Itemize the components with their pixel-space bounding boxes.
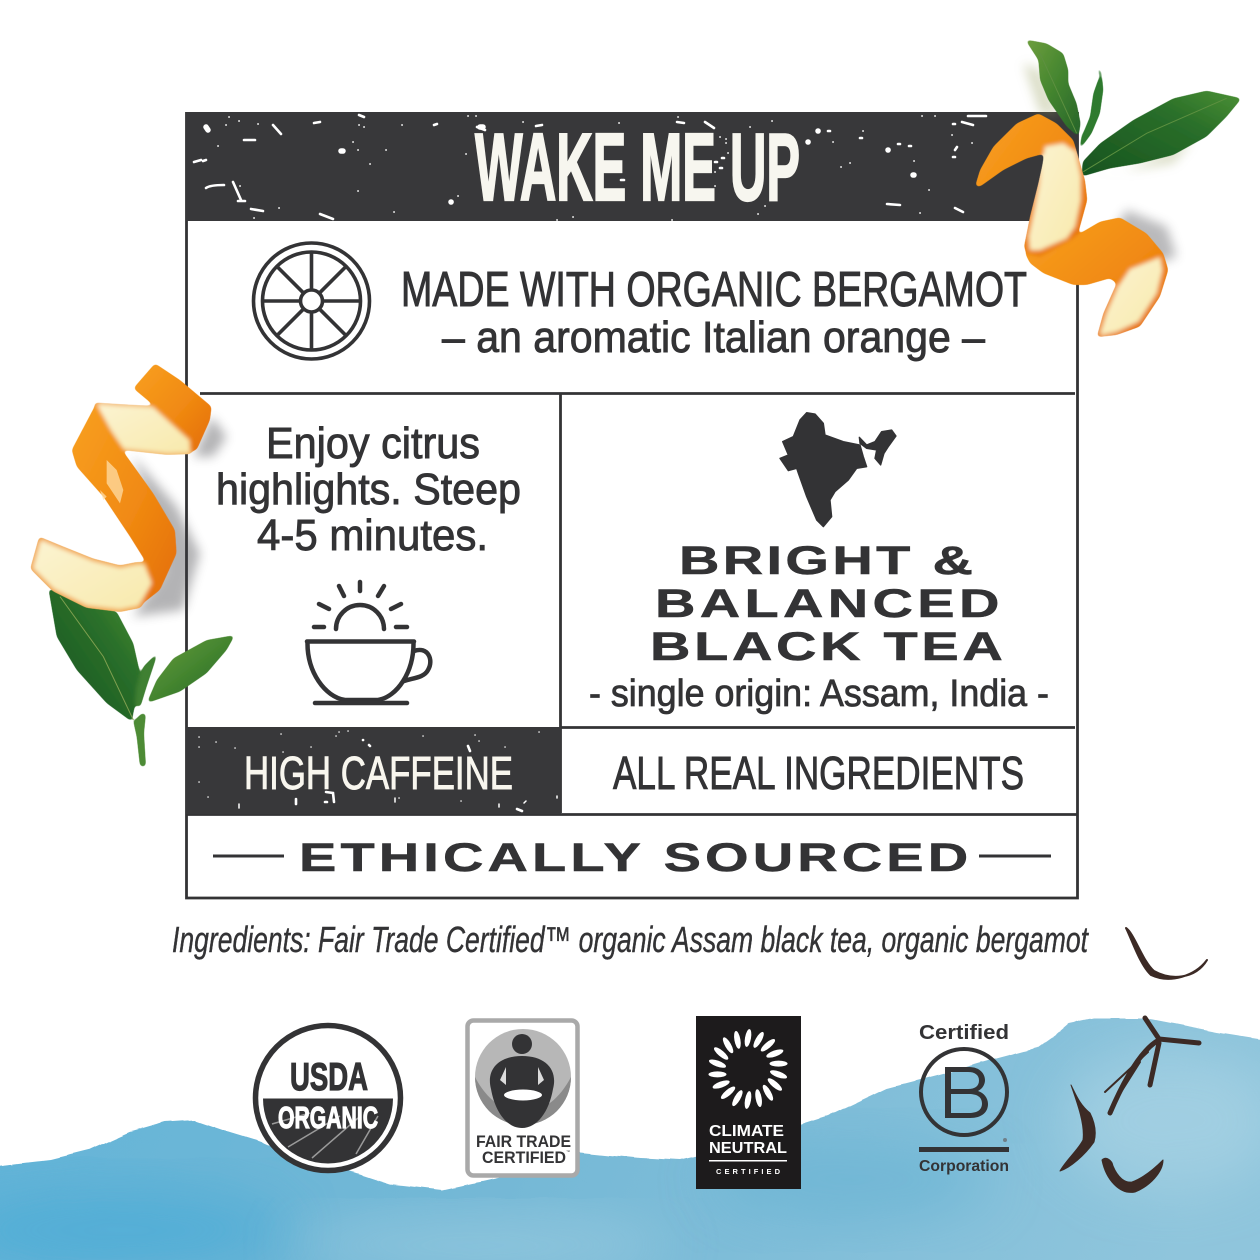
badge: climate neutral <box>696 1016 801 1189</box>
text: enjoy citrus: highlights. Steep <box>216 465 521 514</box>
badge: certified b corporation: Certified <box>919 1022 1009 1044</box>
dried tea leaves <box>1060 928 1207 1192</box>
badge: climate neutral: CLIMATE <box>709 1123 784 1140</box>
header band <box>186 112 1078 221</box>
subheading: aromatic italian orange: – an aromatic Italian orange – <box>442 313 985 362</box>
tea leaf: top <box>1126 928 1207 979</box>
shadows <box>1023 63 1193 263</box>
icon: orange slice <box>254 243 370 359</box>
heading: bright and balanced black tea: BRIGHT & <box>679 539 973 583</box>
text: single origin: - single origin: Assam, India - <box>589 673 1049 715</box>
badge: usda organic <box>256 1026 400 1170</box>
garnish: orange peel and tea leaves left <box>32 363 235 767</box>
peel <box>32 363 212 611</box>
badge: high caffeine <box>186 727 561 814</box>
leaves <box>48 588 235 767</box>
panel: steep instructions <box>216 419 521 703</box>
peel <box>975 113 1168 337</box>
icon: india map <box>780 413 896 527</box>
title: WAKE ME UP: WAKE ME UP <box>475 114 800 221</box>
frame outline <box>186 112 1078 898</box>
leaf veins <box>1040 53 1227 172</box>
heading: bright and balanced black tea: BALANCED <box>655 582 999 626</box>
garnish: orange peel and tea leaves top right <box>975 39 1242 337</box>
text: enjoy citrus: 4-5 minutes. <box>257 511 488 560</box>
badge: climate neutral: CERTIFIED <box>716 1167 781 1176</box>
badge: usda organic: USDA <box>290 1056 368 1099</box>
peel highlight <box>100 460 123 503</box>
badge: fair trade certified: ™ <box>566 1149 570 1154</box>
text: enjoy citrus <box>216 419 521 560</box>
badge: climate neutral: NEUTRAL <box>709 1140 787 1157</box>
background watercolor wave <box>0 1010 1260 1260</box>
badge: fair trade certified: FAIR TRADE <box>476 1132 571 1151</box>
badge: fair trade certified: CERTIFIED <box>482 1148 566 1167</box>
tea leaf: thin strand <box>1105 1052 1148 1100</box>
badge: high caffeine: HIGH CAFFEINE <box>244 747 513 799</box>
badge: fair trade certified <box>468 1020 578 1176</box>
tea leaf: branch <box>1110 1018 1199 1113</box>
leaves <box>1025 39 1242 177</box>
icon: cup with rising sun <box>307 582 430 703</box>
tea leaf: left curve <box>1060 1085 1095 1171</box>
heading: bright and balanced black tea: BLACK TEA <box>650 625 1003 669</box>
badge: usda organic: ORGANIC <box>278 1100 378 1135</box>
caffeine speckles <box>199 731 557 811</box>
heading: made with organic bergamot: MADE WITH ORGANIC BERGAMOT <box>401 263 1027 317</box>
badge: certified b corporation: Corporation <box>919 1158 1009 1175</box>
heading: bright and balanced black tea <box>650 539 1003 669</box>
panel: origin <box>589 413 1049 715</box>
badge: certified b corporation <box>919 1022 1009 1175</box>
panel: bergamot <box>254 243 1027 362</box>
leaf vein <box>60 597 133 720</box>
text: enjoy citrus: Enjoy citrus <box>266 419 480 468</box>
panel: main frame <box>186 112 1078 898</box>
shadows <box>133 417 227 617</box>
tea leaf: bottom curve <box>1102 1158 1163 1192</box>
divider lines <box>186 393 1077 814</box>
label: ethically sourced: ETHICALLY SOURCED <box>299 836 968 880</box>
header speckles <box>194 115 986 220</box>
label: all real ingredients: ALL REAL INGREDIENTS <box>613 747 1024 799</box>
